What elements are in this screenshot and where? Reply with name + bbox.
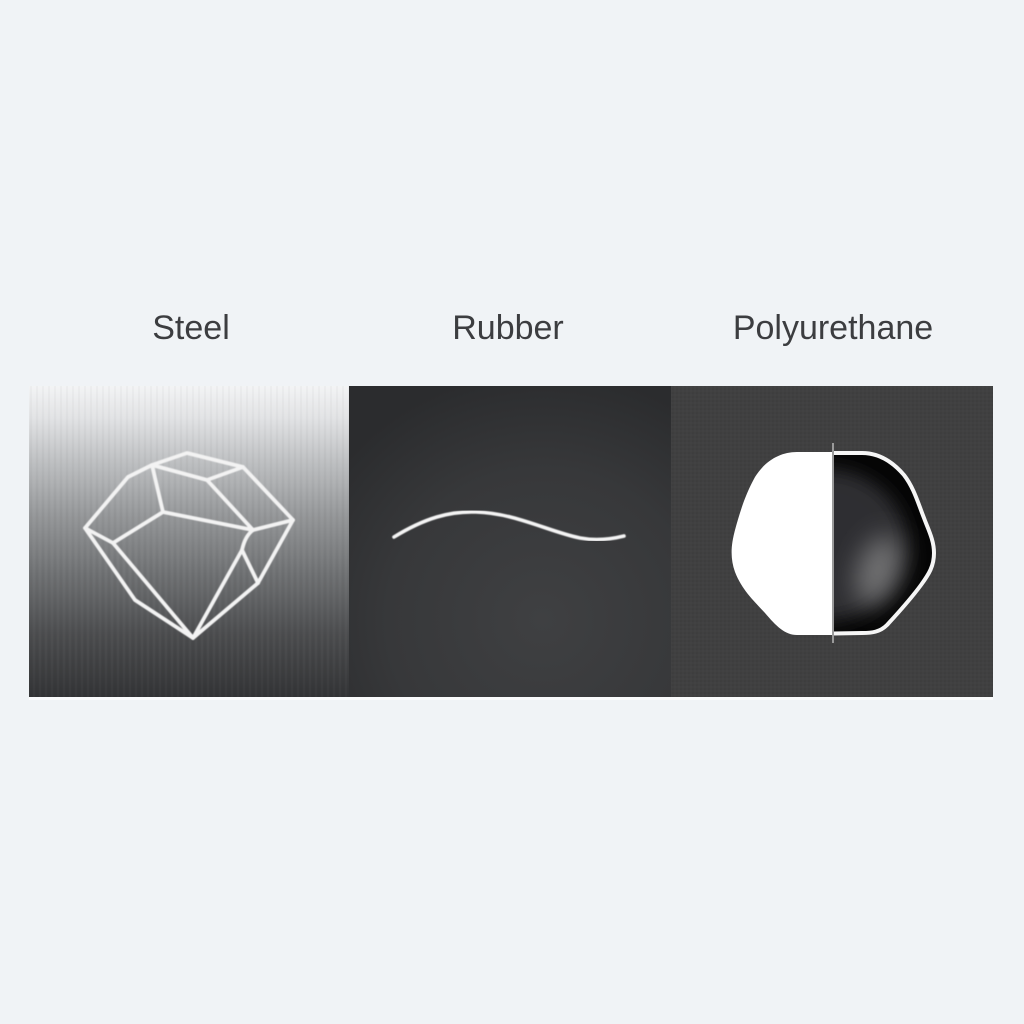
label: Polyurethane: Polyurethane [733,309,933,347]
icon: faceted gem outline [85,453,293,638]
panel frame: light base edge [29,697,993,700]
panel: steel [29,386,349,697]
label: Rubber: Rubber [452,309,564,347]
panel: rubber [349,386,671,697]
label: Steel: Steel [152,309,230,347]
icon: wavy line [394,512,624,539]
panel: polyurethane [671,386,993,697]
icon: half white, half dark blob [732,443,936,643]
